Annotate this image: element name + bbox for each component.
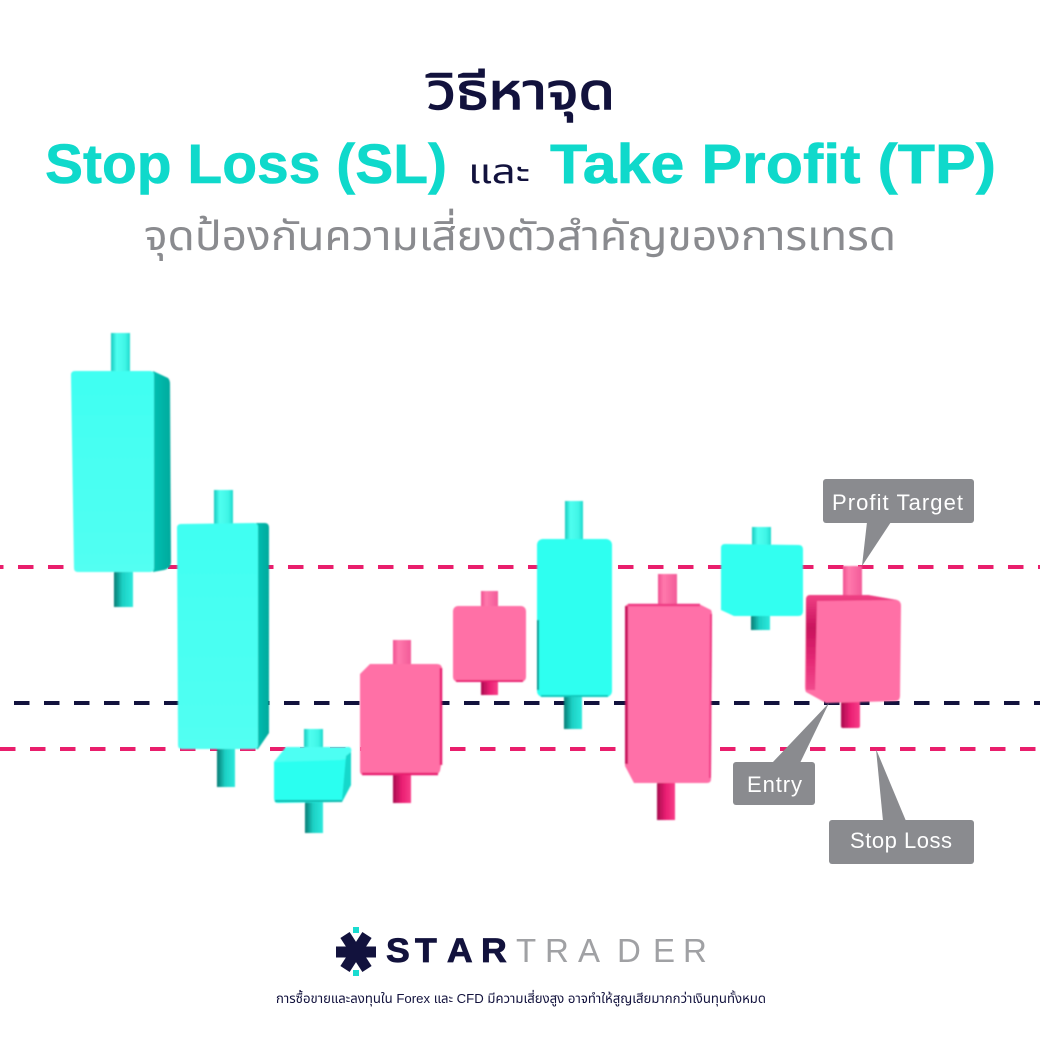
candle 1: teal (71, 333, 171, 607)
candle 6: teal (537, 501, 612, 729)
level line: stop loss (0, 747, 1040, 751)
candle 9: pink (805, 566, 901, 728)
callout: Entry: Entry (747, 772, 802, 797)
callout: Stop Loss: Stop Loss (850, 828, 952, 853)
heading part: and: และ (468, 153, 530, 191)
subtitle: จุดป้องกันความเสี่ยงตัวสำคัญของการเทรด (144, 208, 896, 261)
level line: entry (14, 701, 1040, 705)
candle 4: pink (360, 640, 442, 803)
icon: star mark (336, 927, 376, 976)
heading part: Take Profit (TP): Take Profit (TP) (550, 132, 996, 195)
logo: Star Trader (336, 927, 707, 976)
logo text: STAR: STAR (386, 932, 507, 970)
callout: Stop Loss (829, 749, 974, 864)
candle 3: teal (274, 729, 351, 833)
level line: profit target (0, 565, 1040, 569)
disclaimer: การซื้อขายและลงทุนใน Forex และ CFD มีความเสี่ยงสูง อาจทำให้สูญเสียมากกว่าเงินทุนทั้งหมด (276, 989, 766, 1006)
chart: candlesticks with levels (0, 333, 1040, 833)
title: Thai heading: วิธีหาจุด (426, 64, 615, 122)
heading: Stop Loss and Take Profit (45, 132, 996, 195)
logo text: TRADER: TRADER (516, 932, 707, 969)
callout: Entry (733, 703, 829, 805)
candle 5: pink (453, 591, 526, 695)
candle 2: teal (177, 490, 269, 787)
heading part: Stop Loss (SL): Stop Loss (SL) (45, 132, 447, 195)
candle 7: pink (625, 574, 712, 820)
callout: Profit Target: Profit Target (832, 490, 963, 515)
candle 8: teal (721, 527, 803, 630)
callout: Profit Target (823, 479, 974, 566)
